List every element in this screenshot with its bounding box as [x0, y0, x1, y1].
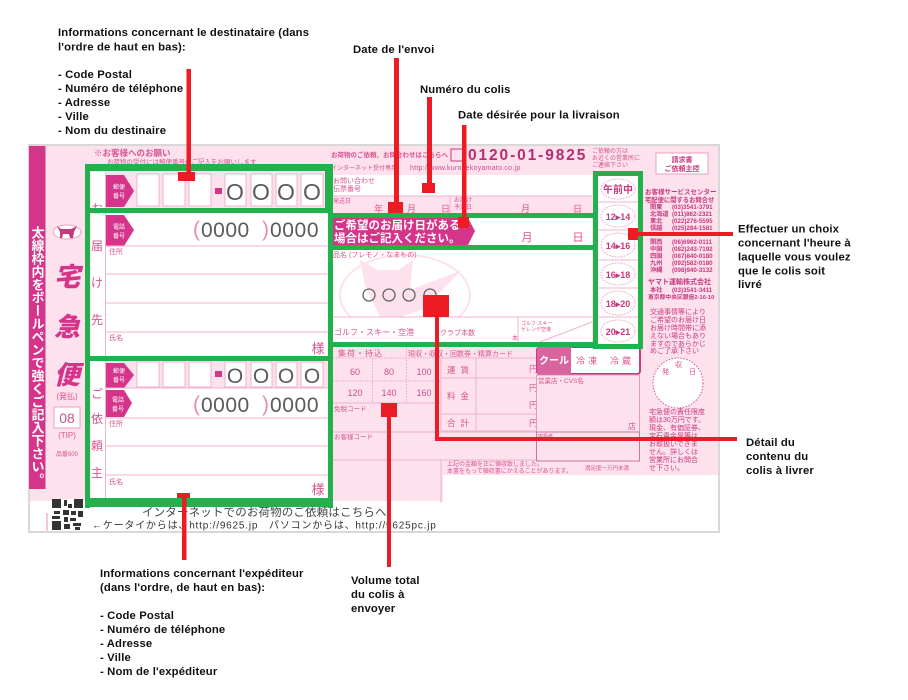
store and code boxes: 上記の金額を正に領収致しました。	[447, 460, 543, 468]
date stamp circle: 収	[675, 360, 682, 369]
label: delivery time choice: livré	[738, 279, 762, 291]
liability notes: せ下さい。	[649, 464, 684, 472]
shipping date row: 年	[374, 203, 383, 214]
recipient fields: 0000	[270, 219, 319, 242]
size and volume table	[333, 348, 513, 403]
internet order footer	[47, 499, 437, 532]
red pointer: total volume	[381, 403, 397, 567]
label: delivery time choice: laquelle vous voulez	[738, 252, 851, 264]
sender fields: (	[193, 393, 200, 416]
fare table: 運賃	[447, 365, 474, 375]
fare table	[441, 358, 538, 431]
parcel contents area: クラブ本数	[440, 328, 475, 337]
service brand column: (発払)	[56, 391, 78, 401]
recipient fields: O	[252, 179, 270, 205]
sender fields: O	[227, 365, 243, 388]
cool delivery selector: クール	[539, 355, 569, 367]
label: total volume: envoyer	[351, 603, 396, 615]
customer service centre list: (06)6962-0111	[672, 239, 712, 246]
store and code boxes: お客様コード	[334, 432, 373, 441]
customer service centre list: (03)3541-3791	[672, 204, 713, 211]
label: sender information: - Numéro de téléphone	[100, 624, 225, 636]
fare table: 料金	[447, 391, 474, 401]
form header: お荷物の受付には郵便番号のご記入をお願いします	[107, 157, 257, 166]
fare table: 円	[529, 364, 538, 374]
red pointer: delivery time	[628, 228, 733, 240]
delivery time slots: 16▸18	[606, 270, 630, 280]
label: sender information: (dans l'ordre, de haut en bas):	[100, 582, 265, 594]
magenta vertical instruction strip	[29, 146, 46, 489]
sender fields: 電話	[112, 397, 124, 404]
sender fields: 氏名	[109, 477, 123, 486]
customer service centre list: えない場合もあり	[650, 331, 706, 340]
label: delivery time choice: que le colis soit	[738, 266, 825, 278]
internet order footer: インターネットでのお荷物のご依頼はこちらへ	[142, 505, 387, 519]
parcel contents area: 本	[512, 334, 518, 342]
sender fields: 住所	[109, 419, 123, 428]
liability notes: 宝石貴金属等は	[649, 431, 698, 440]
customer service centre list: 東京都中央区銀座2-16-10	[648, 293, 714, 301]
label: parcel number: Numéro du colis	[420, 84, 511, 96]
label: sender information: - Nom de l'expéditeur	[100, 666, 218, 678]
parcel contents area	[333, 250, 592, 342]
label: recipient information: - Numéro de téléphone	[58, 83, 183, 95]
form header: 請求書	[672, 155, 692, 164]
shipping date row: 月	[521, 204, 530, 214]
liability notes: 現金、有価証券、	[649, 423, 705, 432]
size and volume table: 60	[350, 367, 360, 377]
customer service centre list: 交通事情等により	[650, 307, 706, 316]
desired delivery date banner: 月	[522, 232, 532, 244]
customer service centre list: めご了承下さい	[650, 346, 699, 355]
internet order footer: ←ケータイからは、http://9625.jp パソコンからは、http://9625pc.jp	[92, 520, 437, 532]
form header: インターネット受付専用	[331, 164, 397, 172]
label: parcel contents detail: colis à livrer	[746, 465, 814, 477]
customer service centre list: (025)284-1581	[672, 225, 713, 232]
customer service centre list: 東北	[650, 217, 663, 225]
form header: ご連絡下さい	[592, 161, 628, 169]
service brand column	[53, 225, 85, 458]
customer service centre list: 宅配便に関するお問合せ	[645, 195, 714, 204]
customer service centre list: 関西	[650, 239, 662, 246]
delivery time slots: 20▸21	[606, 327, 630, 337]
service brand column: (TIP)	[58, 431, 76, 440]
parcel contents area: 品名 (フレモノ・なまもの)	[333, 250, 417, 259]
customer service centre list: 北海道	[650, 210, 669, 218]
customer service centre list: お届け時間帯に添	[650, 323, 706, 332]
red pointer: shipping date	[388, 58, 403, 213]
green highlight: date and contents boxes	[330, 213, 593, 347]
customer service centre list: (082)243-7192	[672, 246, 713, 253]
size and volume table: 160	[416, 388, 432, 398]
label: sender information: Informations concernant l'expéditeur	[100, 568, 304, 580]
customer service centre list: (092)582-0180	[672, 260, 713, 267]
customer service centre list: 四国	[650, 253, 662, 260]
size and volume table: 80	[384, 367, 394, 377]
label: delivery time choice: Effectuer un choix	[738, 224, 840, 236]
delivery time slots: 午前中	[603, 183, 633, 196]
liability notes: 額は30万円です。	[649, 415, 705, 424]
form header: ご依頼主控	[664, 164, 700, 173]
recipient fields: 番号	[113, 233, 125, 240]
recipient fields: 0000	[201, 219, 250, 242]
shipping date row: 日	[441, 204, 450, 214]
liability notes: 営業所にお問合	[649, 455, 698, 464]
store and code boxes	[333, 375, 640, 503]
sender fields: 様	[311, 482, 325, 497]
label: total volume: du colis à	[351, 589, 405, 601]
recipient fields: )	[262, 218, 269, 241]
customer service centre list: 信越	[650, 224, 663, 232]
shipping date row: 伝票番号	[333, 184, 361, 193]
form header: ※お客様へのお願い	[94, 148, 171, 158]
sender fields: 依	[91, 412, 103, 426]
size and volume table: 100	[416, 367, 432, 377]
recipient fields: (	[193, 218, 200, 241]
customer service centre list: 九州	[650, 259, 662, 267]
customer service centre list: (098)940-3132	[672, 267, 713, 274]
store and code boxes: 営業店・CVS名	[538, 376, 584, 385]
sender fields: 頼	[91, 439, 103, 453]
date stamp circle: 発	[662, 367, 669, 376]
delivery time slots: 18▸20	[606, 299, 630, 309]
recipient fields: O	[277, 179, 295, 205]
recipient fields: 住所	[109, 247, 123, 256]
store and code boxes: 満足度一万円未満	[585, 464, 630, 472]
shipping date row: 予定日	[454, 203, 472, 211]
shipping date row: 日	[573, 204, 582, 214]
sender fields: 番号	[112, 406, 124, 413]
form header: 0120-01-9825	[468, 147, 587, 164]
desired delivery date banner: 場合はご記入ください。	[334, 231, 460, 245]
shipping date row: お届け	[454, 197, 472, 204]
fare table: 合計	[447, 418, 474, 428]
store and code boxes: 取扱者	[538, 433, 553, 440]
green highlight: delivery time column	[593, 171, 643, 349]
recipient fields: 番号	[113, 193, 125, 200]
label: recipient information: - Ville	[58, 111, 89, 123]
parcel delivery form	[29, 145, 719, 532]
label: sender information: - Adresse	[100, 638, 152, 650]
label: recipient information: Informations concernant le destinataire (dans	[58, 27, 309, 39]
desired delivery date banner	[333, 218, 592, 245]
recipient fields: 氏名	[109, 333, 123, 342]
customer service centre list: ヤマト運輸株式会社	[648, 277, 711, 286]
date stamp circle: 日	[689, 368, 696, 376]
customer service centre list: (011)862-2321	[672, 211, 713, 218]
shipping date row: お問い合わせ	[333, 176, 375, 185]
store and code boxes: 本書をもって領収書にかえることがあります。	[447, 467, 572, 475]
sender fields: ご	[91, 386, 103, 401]
recipient fields	[90, 172, 328, 356]
red pointer: parcel number	[422, 97, 435, 193]
parcel contents area: ゲレンデ空港	[521, 326, 551, 333]
red pointer: parcel contents	[423, 295, 737, 441]
label: recipient information: - Nom du destinaire	[58, 125, 166, 137]
label: parcel contents detail: contenu du	[746, 451, 808, 463]
recipient fields: 郵便	[113, 183, 125, 191]
sender fields: )	[262, 393, 269, 416]
date stamp circle	[653, 358, 703, 408]
form sheet	[29, 145, 719, 532]
red pointer: recipient	[178, 69, 195, 181]
customer service centre list: お客様サービスセンター	[645, 187, 716, 196]
cool delivery selector	[537, 347, 640, 374]
form header	[94, 147, 708, 174]
sender fields: O	[253, 365, 269, 388]
recipient fields: O	[226, 179, 244, 205]
fare table: 円	[529, 418, 538, 428]
shipping date row: 発送日	[333, 197, 351, 205]
cool delivery selector: 冷凍	[576, 355, 600, 366]
cool delivery selector: 冷蔵	[610, 355, 634, 366]
store and code boxes: 免税コード	[334, 404, 366, 413]
customer service centre list	[645, 187, 716, 355]
service brand column: 08	[59, 410, 75, 426]
sender fields: O	[278, 365, 294, 388]
red pointer: sender	[177, 493, 190, 560]
customer service centre list: ますのであらかじ	[650, 340, 706, 348]
label: sender information: - Code Postal	[100, 610, 174, 622]
desired delivery date banner: 日	[572, 232, 584, 244]
label: delivery time choice: concernant l'heure à	[738, 238, 851, 250]
customer service centre list: ご希望のお届け日	[650, 315, 706, 324]
size and volume table: 現収・収収・回数券・精算カード	[408, 349, 513, 358]
customer service centre list: 本社	[650, 286, 663, 294]
form header: お近くの営業所に	[592, 154, 640, 162]
sender fields: O	[304, 365, 320, 388]
customer service centre list: (087)840-0180	[672, 253, 713, 260]
liability notes: 宅急便の責任限度	[649, 407, 705, 416]
form header: http://www.kuronekoyamato.co.jp	[410, 165, 520, 172]
recipient fields: お	[91, 202, 103, 216]
store and code boxes: 店	[628, 422, 636, 431]
green highlight: recipient boxes	[85, 164, 333, 508]
recipient fields: 届	[91, 239, 103, 253]
customer service centre list: 沖縄	[650, 266, 663, 274]
parcel contents area: ゴルフ・スキー・空港	[334, 327, 414, 337]
label: shipping date: Date de l'envoi	[353, 44, 434, 56]
recipient fields: 様	[311, 341, 325, 356]
fare table: 円	[529, 400, 538, 410]
magenta vertical instruction strip: 太線枠内をボールペンで強くご記入下さい。	[30, 225, 44, 486]
sender fields: 0000	[270, 394, 319, 417]
customer service centre list: 中国	[650, 245, 662, 253]
sender fields: 主	[91, 466, 103, 480]
sender fields: 0000	[201, 394, 250, 417]
label: recipient information: - Code Postal	[58, 69, 132, 81]
size and volume table: 140	[381, 388, 397, 398]
recipient fields: 先	[91, 313, 103, 327]
label: recipient information: l'ordre de haut en bas):	[58, 42, 186, 54]
size and volume table: 120	[347, 388, 363, 398]
delivery time slots: 14▸16	[606, 241, 630, 251]
shipping date row	[333, 175, 592, 214]
label: parcel contents detail: Détail du	[746, 437, 795, 449]
desired delivery date banner: ご希望のお届け日がある	[334, 218, 460, 232]
service brand column: 急	[54, 312, 81, 342]
recipient fields: け	[91, 276, 103, 290]
fare table: 円	[529, 383, 538, 393]
label: desired delivery date: Date désirée pour la livraison	[458, 110, 620, 122]
label: recipient information: - Adresse	[58, 97, 110, 109]
label: total volume: Volume total	[351, 575, 420, 587]
parcel contents area: ゴルフ スキー	[521, 320, 552, 327]
service brand column: 便	[54, 360, 85, 390]
sender fields: 番号	[113, 377, 125, 384]
customer service centre list: (022)276-5595	[672, 218, 713, 225]
delivery time slots	[598, 176, 638, 344]
delivery time slots: 12▸14	[606, 212, 630, 222]
sender fields: 郵便	[113, 367, 125, 375]
form header: ご依頼の方は	[592, 147, 628, 155]
form header: お荷物のご依頼、お問合わせはこちらへ	[331, 150, 448, 159]
liability notes: お取扱いできま	[649, 439, 698, 448]
service brand column: 品番900	[56, 451, 79, 458]
liability notes	[649, 407, 705, 472]
sender fields	[90, 361, 328, 499]
size and volume table: 集荷・持込	[338, 348, 383, 358]
customer service centre list: (03)3541-3411	[672, 287, 713, 294]
red pointer: desired delivery date	[458, 125, 469, 228]
customer service centre list: 関東	[650, 203, 663, 211]
service brand column: 宅	[54, 262, 84, 292]
recipient fields: O	[303, 179, 321, 205]
liability notes: せん。詳しくは	[649, 447, 698, 456]
label: sender information: - Ville	[100, 652, 131, 664]
recipient fields: 電話	[113, 224, 125, 231]
shipping date row: 月	[407, 204, 416, 214]
